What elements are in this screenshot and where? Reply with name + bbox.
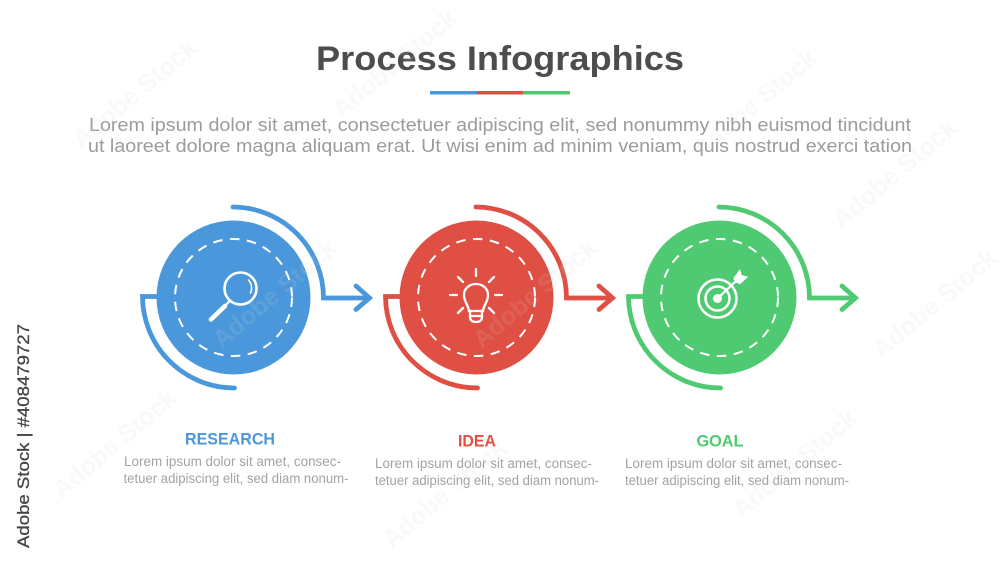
- stock watermark pattern: Adobe Stock: [827, 114, 962, 234]
- title: Process Infographics: [316, 40, 684, 78]
- outer arc and arrow: blue: [233, 207, 369, 298]
- arrow head: blue: [356, 286, 370, 310]
- step 3: goal circle with arcs and arrow: [628, 207, 856, 388]
- research column text: [124, 430, 348, 486]
- arrow head: green: [842, 286, 856, 310]
- lower arc: red: [386, 296, 478, 388]
- stock watermark pattern: Adobe Stock: [687, 44, 822, 164]
- outer arc and arrow: red: [476, 207, 612, 298]
- lower arc: blue: [142, 296, 234, 388]
- stock watermark pattern: Adobe Stock: [377, 434, 512, 554]
- intro text: Lorem ipsum dolor sit amet, consectetuer adipiscing elit, sed nonummy nibh euismod tincidunt: [89, 115, 911, 135]
- step 2: idea circle with arcs and arrow: [386, 207, 612, 388]
- description: research: tetuer adipiscing elit, sed diam nonum-: [124, 471, 348, 486]
- stock watermark pattern: Adobe Stock: [327, 4, 462, 124]
- intro text: [88, 115, 912, 156]
- tricolor title underline: [430, 91, 570, 94]
- stock watermark pattern: Adobe Stock: [67, 34, 202, 154]
- disc: red: [400, 220, 554, 374]
- intro text: ut laoreet dolore magna aliquam erat. Ut wisi enim ad minim veniam, quis nostrud exerci tation: [88, 136, 912, 156]
- description: idea: tetuer adipiscing elit, sed diam nonum-: [375, 473, 599, 488]
- stock watermark pattern: Adobe Stock: [207, 234, 342, 354]
- disc: green: [642, 220, 796, 374]
- description: idea: [375, 456, 599, 488]
- stock watermark pattern: Adobe Stock: [47, 384, 182, 504]
- stock credit: Adobe Stock | #408479727: [14, 324, 33, 548]
- stock watermark pattern: Adobe Stock: [867, 244, 1000, 364]
- stock watermark pattern: Adobe Stock: [467, 234, 602, 354]
- idea column text: [375, 432, 599, 488]
- heading: research: RESEARCH: [185, 430, 275, 448]
- arrow head: red: [599, 286, 612, 310]
- description: idea: Lorem ipsum dolor sit amet, consec-: [375, 456, 592, 471]
- step 1: research circle with arcs and arrow: [142, 207, 370, 388]
- description: goal: [625, 456, 849, 488]
- goal column text: [625, 432, 849, 488]
- heading: idea: IDEA: [458, 432, 496, 450]
- description: goal: tetuer adipiscing elit, sed diam nonum-: [625, 473, 849, 488]
- heading: goal: GOAL: [696, 432, 744, 450]
- icon: light bulb: [450, 269, 502, 322]
- stock watermark pattern: Adobe Stock: [727, 404, 862, 524]
- icon: magnifier: [211, 272, 256, 320]
- outer arc and arrow: green: [719, 207, 855, 298]
- description: goal: Lorem ipsum dolor sit amet, consec-: [625, 456, 842, 471]
- dashed ring: red: [418, 239, 535, 356]
- dashed ring: green: [661, 239, 778, 356]
- description: research: [124, 454, 348, 486]
- disc: blue: [156, 220, 310, 374]
- icon: target with arrow: [698, 269, 748, 318]
- lower arc: green: [628, 296, 720, 388]
- description: research: Lorem ipsum dolor sit amet, consec-: [124, 454, 341, 469]
- dashed ring: blue: [175, 239, 292, 356]
